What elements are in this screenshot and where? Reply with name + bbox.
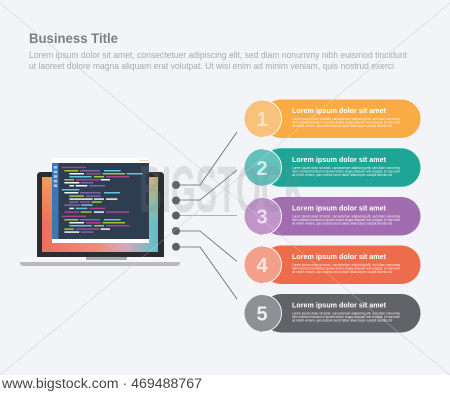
panel: item 1: nibh euismod tincidunt ut laoreet dolore magna aliquam erat volutpat. Ut wisi enim bbox=[292, 120, 400, 124]
panel: item 5: Lorem ipsum dolor sit amet bbox=[292, 300, 387, 310]
panel: item 4: Lorem ipsum dolor sit amet bbox=[292, 252, 387, 261]
code window bbox=[52, 158, 149, 243]
panel: item 4: nibh euismod tincidunt ut laoreet dolore magna aliquam erat volutpat. Ut wisi enim bbox=[292, 266, 400, 270]
panel: item 1: Lorem ipsum dolor sit amet, consectetuer adipiscing elit, sed diam nonummy bbox=[292, 117, 400, 121]
panel: item 5: Lorem ipsum dolor sit amet, consectetuer adipiscing elit, sed diam nonummy bbox=[292, 312, 400, 316]
panel: item 4: 4 bbox=[256, 255, 268, 277]
code lines bbox=[62, 167, 143, 233]
panel: item 3: nibh euismod tincidunt ut laoreet dolore magna aliquam erat volutpat. Ut wisi enim bbox=[292, 218, 400, 222]
body text bbox=[29, 50, 407, 71]
panel: item 4 bbox=[244, 246, 420, 284]
panel: item 1: ad minim veniam, quis nostrud exerci tation ullamcorper suscipit lobortis nisl bbox=[292, 124, 392, 128]
title: Business Title bbox=[29, 30, 118, 46]
panel: item 3: ad minim veniam, quis nostrud exerci tation ullamcorper suscipit lobortis nisl bbox=[292, 222, 392, 226]
panel: item 3 bbox=[244, 197, 420, 236]
panel: item 4: Lorem ipsum dolor sit amet, consectetuer adipiscing elit, sed diam nonummy bbox=[292, 263, 400, 267]
panel: item 2: ad minim veniam, quis nostrud exerci tation ullamcorper suscipit lobortis nisl bbox=[292, 173, 392, 177]
body text: Lorem ipsum dolor sit amet, consectetuer adipiscing elit, sed diam nonummy nibh euismod tincidunt bbox=[29, 50, 407, 60]
body text: ut laoreet dolore magna aliquam erat volutpat. Ut wisi enim ad minim veniam, quis nostrud exerci bbox=[29, 61, 394, 71]
panel: item 1: 1 bbox=[256, 109, 268, 131]
panel: item 2: 2 bbox=[256, 158, 268, 180]
laptop screen bbox=[37, 172, 164, 257]
panel: item 5: 5 bbox=[256, 304, 268, 326]
panel: item 3: 3 bbox=[256, 206, 268, 228]
panel: item 2 bbox=[244, 148, 420, 187]
laptop base bbox=[20, 257, 180, 266]
panel: item 5: ad minim veniam, quis nostrud exerci tation ullamcorper suscipit lobortis nisl bbox=[292, 318, 392, 322]
connector lines and dots bbox=[172, 132, 237, 299]
panel: item 2: Lorem ipsum dolor sit amet bbox=[292, 155, 387, 164]
panel: item 2: nibh euismod tincidunt ut laoreet dolore magna aliquam erat volutpat. Ut wisi enim bbox=[292, 170, 400, 174]
panel: item 1: Lorem ipsum dolor sit amet bbox=[292, 106, 387, 115]
panel: item 3: Lorem ipsum dolor sit amet bbox=[292, 204, 387, 212]
panel: item 5: nibh euismod tincidunt ut laoreet dolore magna aliquam erat volutpat. Ut wisi enim bbox=[292, 315, 400, 319]
panel: item 3: Lorem ipsum dolor sit amet, consectetuer adipiscing elit, sed diam nonummy bbox=[292, 214, 400, 218]
panel: item 5 bbox=[244, 294, 420, 332]
panel: item 1 bbox=[244, 100, 420, 138]
footer credit: www.bigstock.com · 469488767 bbox=[1, 376, 202, 391]
panel: item 4: ad minim veniam, quis nostrud exerci tation ullamcorper suscipit lobortis nisl bbox=[292, 270, 392, 274]
panel: item 2: Lorem ipsum dolor sit amet, consectetuer adipiscing elit, sed diam nonummy bbox=[292, 166, 400, 170]
icon: laptop with code window bbox=[20, 158, 180, 266]
